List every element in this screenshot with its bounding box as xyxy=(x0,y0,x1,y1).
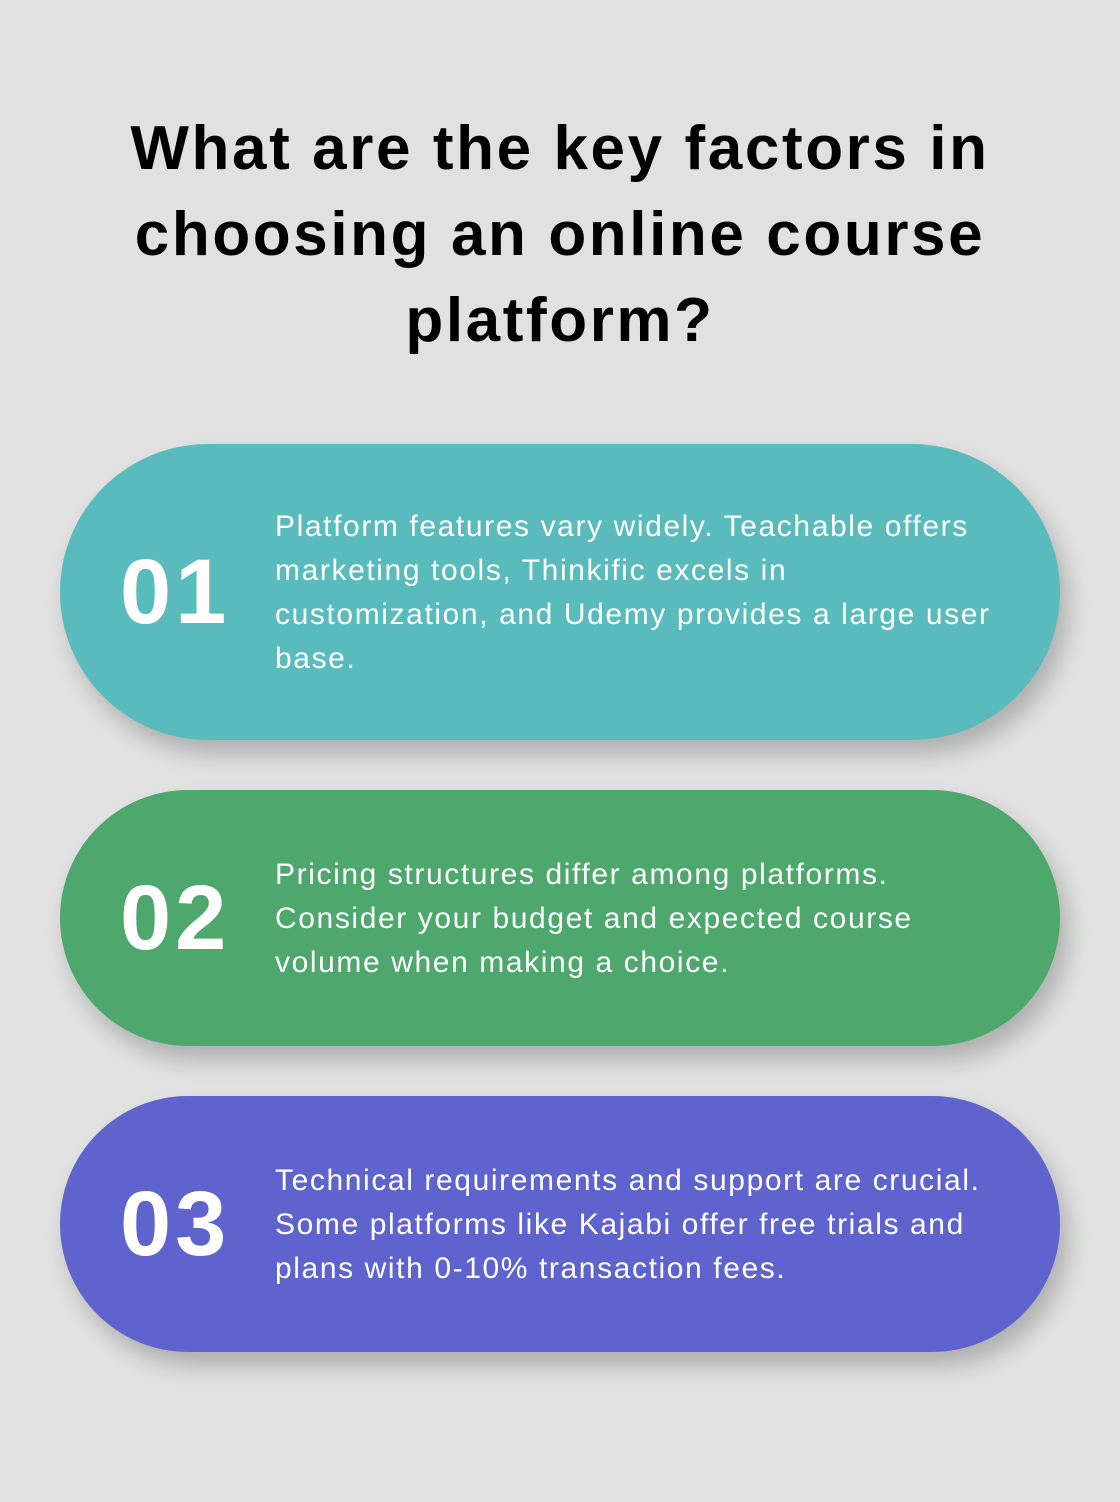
text 01: base. xyxy=(275,642,356,675)
text 03: Some platforms like Kajabi offer free trials and xyxy=(275,1208,965,1241)
text 03: Technical requirements and support are crucial. xyxy=(275,1164,981,1197)
text 01 xyxy=(275,510,991,675)
title: choosing an online course xyxy=(135,200,985,269)
panel: factor 03 xyxy=(60,1096,1060,1352)
panel: factor 02 xyxy=(60,790,1060,1046)
number 03: 03 xyxy=(120,1173,230,1275)
number 02: 02 xyxy=(120,867,230,969)
title xyxy=(130,114,990,355)
text 03: plans with 0-10% transaction fees. xyxy=(275,1252,786,1285)
text 03 xyxy=(275,1164,981,1285)
title: What are the key factors in xyxy=(130,114,990,183)
text 02 xyxy=(275,858,913,979)
number 01: 01 xyxy=(120,541,230,643)
text 01: marketing tools, Thinkific excels in xyxy=(275,554,787,587)
panel: factor 01 xyxy=(60,444,1060,740)
text 02: volume when making a choice. xyxy=(275,946,730,979)
text 02: Pricing structures differ among platforms. xyxy=(275,858,889,891)
text 01: customization, and Udemy provides a large user xyxy=(275,598,991,631)
text 02: Consider your budget and expected course xyxy=(275,902,913,935)
title: platform? xyxy=(405,286,715,355)
text 01: Platform features vary widely. Teachable offers xyxy=(275,510,969,543)
